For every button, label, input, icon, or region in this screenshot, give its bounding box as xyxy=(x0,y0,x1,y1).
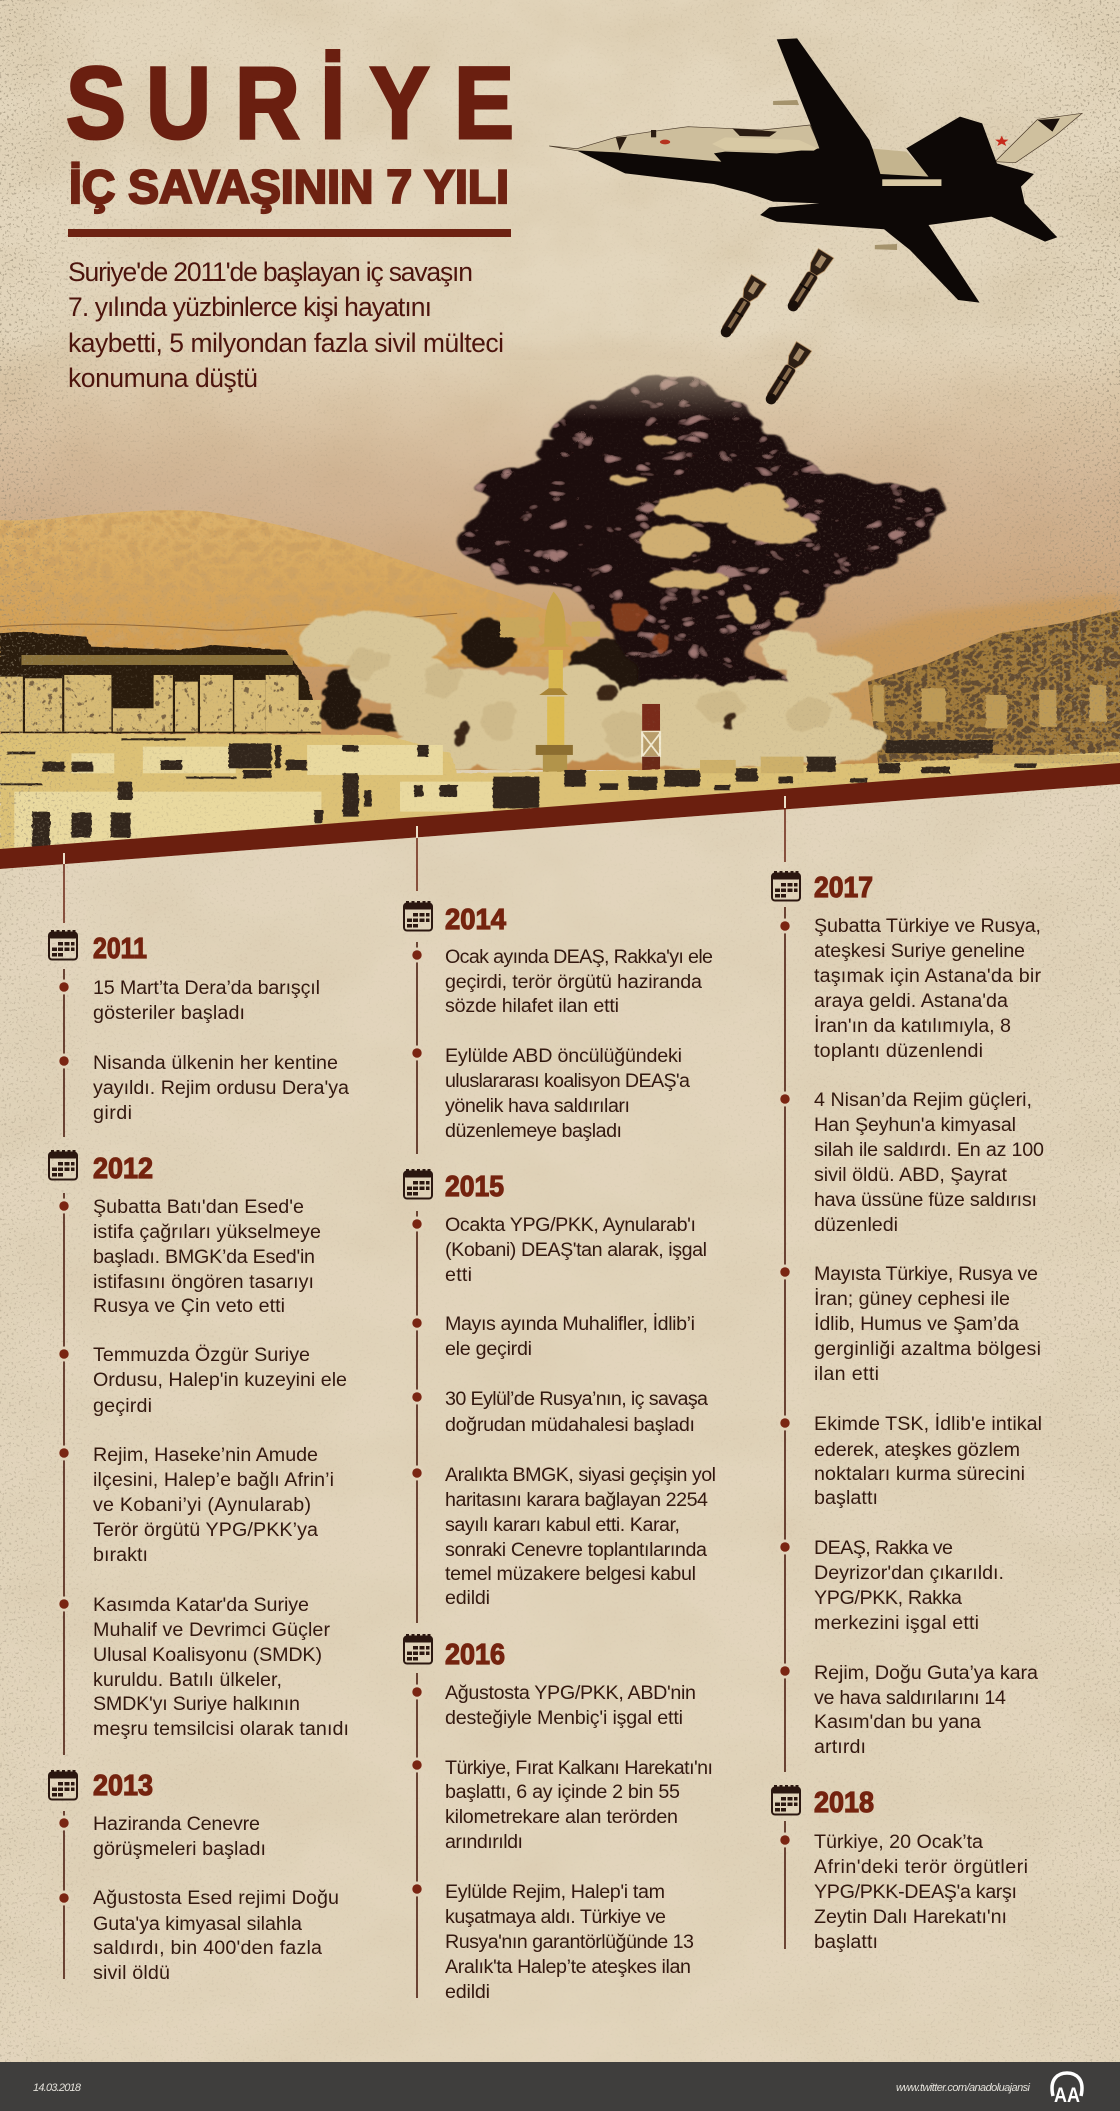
event: 30 Eylül: doğrudan müdahalesi başladı xyxy=(445,1414,695,1436)
jet silhouette xyxy=(577,38,1057,303)
event: Rejim Haseke: ve Kobani’yi (Aynularab) xyxy=(93,1494,311,1516)
event: Aralık xyxy=(445,1464,716,1609)
event: Ocak xyxy=(445,946,713,1017)
section: 2018 xyxy=(772,1785,1028,1953)
year 2013: 2013 xyxy=(93,1770,153,1802)
event: Ağustos xyxy=(445,1682,696,1729)
event: Ekim: noktaları kurma sürecini xyxy=(814,1463,1025,1485)
event: Mayıs: Mayısta Türkiye, Rusya ve xyxy=(814,1263,1038,1285)
bomb 1 xyxy=(783,249,834,315)
event: Şubat: istifa çağrıları yükselmeye xyxy=(93,1221,321,1243)
event: Eylül xyxy=(445,1045,690,1142)
event: DEAŞ Rakka: YPG/PKK, Rakka xyxy=(814,1587,962,1609)
jet red star xyxy=(995,136,1008,146)
sky glow xyxy=(0,330,1120,770)
event: Kasım: Kasımda Katar'da Suriye xyxy=(93,1594,309,1616)
year 2015: 2015 xyxy=(445,1171,504,1203)
event: Şubat xyxy=(814,915,1041,1062)
minaret xyxy=(536,592,573,778)
event: Ağustos: desteğiyle Menbiç'i işgal etti xyxy=(445,1707,683,1729)
event: Haziran xyxy=(93,1813,266,1860)
rising orange fire xyxy=(610,602,671,653)
event: DEAŞ Rakka xyxy=(814,1537,1004,1634)
event: Eylül: kuşatmaya aldı. Türkiye ve xyxy=(445,1906,666,1928)
foreground rooftops xyxy=(0,733,1120,873)
event: Aralık: edildi xyxy=(445,1587,490,1609)
event: Eylül: uluslararası koalisyon DEAŞ'a xyxy=(445,1070,690,1092)
hero scene: city, mountains and explosion xyxy=(0,330,1120,873)
event: Kasım: meşru temsilcisi olarak tanıdı xyxy=(93,1718,349,1740)
right hillside city xyxy=(868,610,1120,767)
pale smoke columns xyxy=(296,612,886,772)
event: Ocak xyxy=(445,1214,707,1286)
event: Doğu Guta xyxy=(814,1662,1038,1758)
event: Şubat: istifasını öngören tasarıyı xyxy=(93,1271,314,1293)
event: Rejim Haseke: ilçesini, Halep’e bağlı Afrin’i xyxy=(93,1469,334,1491)
jet rear fuselage and tail xyxy=(869,148,932,178)
event: Ağustos: sivil öldü xyxy=(93,1962,170,1984)
event: Ocak: Zeytin Dalı Harekatı'nı xyxy=(814,1906,1007,1928)
logo: Anadolu Agency xyxy=(1052,2073,1082,2107)
event: Mayıs: ilan etti xyxy=(814,1363,879,1385)
icon: fighter jet xyxy=(549,38,1082,303)
midground gold blocks xyxy=(500,617,600,637)
cloud light billows xyxy=(607,435,814,625)
event: Şubat xyxy=(93,1196,321,1317)
year 2012: 2012 xyxy=(93,1153,153,1185)
subtitle: İç savaşının 7 yılı: İÇ SAVAŞININ 7 YILI xyxy=(69,160,509,213)
event: Şubat: toplantı düzenlendi xyxy=(814,1040,983,1062)
event: Eylül: Rusya'nın garantörlüğünde 13 xyxy=(445,1931,694,1953)
left mountain xyxy=(0,510,614,667)
intro text: 7. yılında yüzbinlerce kişi hayatını xyxy=(68,292,432,322)
event: Aralık: temel müzakere belgesi kabul xyxy=(445,1563,696,1585)
event: Fırat Kalkanı: başlattı, 6 ay içinde 2 bin 55 xyxy=(445,1781,680,1803)
event: Mayıs xyxy=(445,1312,695,1360)
event: Ekim xyxy=(814,1412,1042,1509)
section: 2016 xyxy=(404,1634,713,2003)
event: Ocak: Türkiye, 20 Ocak’ta xyxy=(814,1831,983,1853)
event: Temmuz: geçirdi xyxy=(93,1395,152,1417)
event: Haziran: görüşmeleri başladı xyxy=(93,1838,266,1860)
event: 4 Nisan: sivil öldü. ABD, Şayrat xyxy=(814,1164,1008,1186)
jet pod highlights xyxy=(712,100,941,250)
event: Mayıs: gerginliği azaltma bölgesi xyxy=(814,1338,1041,1360)
event: Aralık: sayılı kararı kabul etti. Karar, xyxy=(445,1514,680,1536)
event: 4 Nisan: düzenledi xyxy=(814,1214,898,1236)
event: Temmuz xyxy=(93,1344,347,1417)
section: 2013 xyxy=(49,1770,339,1984)
event: Nisan: yayıldı. Rejim ordusu Dera'ya xyxy=(93,1077,349,1099)
event: DEAŞ Rakka: merkezini işgal etti xyxy=(814,1612,979,1634)
intro text: konumuna düştü xyxy=(68,363,258,393)
event: Eylül: edildi xyxy=(445,1981,490,2003)
event: Ocak: Ocakta YPG/PKK, Aynularab'ı xyxy=(445,1214,696,1236)
jet tail dark flash xyxy=(1038,118,1060,132)
event: DEAŞ Rakka: DEAŞ, Rakka ve xyxy=(814,1537,953,1559)
icon: calendar 2011 xyxy=(49,930,77,960)
event: Kasım: Muhalif ve Devrimci Güçler xyxy=(93,1619,330,1641)
event: Şubat: araya geldi. Astana'da xyxy=(814,990,1008,1012)
intro text: Suriye'de 2011'de başlayan iç savaşın xyxy=(68,257,473,287)
event: Şubat: Rusya ve Çin veto etti xyxy=(93,1295,285,1317)
event: Ocak: Afrin'deki terör örgütleri xyxy=(814,1856,1028,1878)
lower ridge line xyxy=(0,613,457,630)
foreground pale buildings xyxy=(14,745,493,848)
event: Nisan: girdi xyxy=(93,1102,132,1124)
event: Ocak: (Kobani) DEAŞ'tan alarak, işgal xyxy=(445,1239,707,1261)
section: 2012 xyxy=(49,1150,349,1740)
footer date: 14.03.2018 xyxy=(33,2082,82,2094)
timeline column 2 lines and dots xyxy=(410,826,424,1998)
event: Ocak: geçirdi, terör örgütü haziranda xyxy=(445,971,702,993)
event: Aralık: sonraki Cenevre toplantılarında xyxy=(445,1539,707,1561)
event: Şubat: Şubatta Batı'dan Esed'e xyxy=(93,1196,304,1218)
paper below band xyxy=(0,784,1120,2062)
event: Rejim Haseke: bıraktı xyxy=(93,1544,148,1566)
event: Eylül: yönelik hava saldırıları xyxy=(445,1095,630,1117)
event: Şubat: Şubatta Türkiye ve Rusya, xyxy=(814,915,1041,937)
event: Nisan: Nisanda ülkenin her kentine xyxy=(93,1052,338,1074)
jet canopy and intake details xyxy=(616,128,777,151)
antenna tower xyxy=(642,704,660,777)
event: Eylül: Eylülde Rejim, Halep'i tam xyxy=(445,1881,665,1903)
event: Kasım: SMDK'yı Suriye halkının xyxy=(93,1693,300,1715)
title: SURİYE: SURİYE xyxy=(66,47,514,160)
right city towers xyxy=(873,685,1106,728)
event: Ekim: ederek, ateşkes gözlem xyxy=(814,1439,1020,1461)
event: Nisan xyxy=(93,1052,349,1124)
event: 4 Nisan: 4 Nisan’da Rejim güçleri, xyxy=(814,1089,1032,1111)
event: Ocak xyxy=(814,1831,1028,1953)
event: 30 Eylül xyxy=(445,1388,708,1436)
icon: calendar 2018 xyxy=(772,1785,800,1814)
icon: calendar 2015 xyxy=(404,1169,432,1198)
event: Fırat Kalkanı: arındırıldı xyxy=(445,1831,523,1853)
bomb 3 xyxy=(761,342,812,408)
section: 2017 xyxy=(772,871,1044,1758)
bomb 2 xyxy=(716,275,767,341)
section: 2014 xyxy=(404,901,713,1142)
lower right buildings xyxy=(700,755,1120,773)
footer url: www.twitter.com/anadoluajansi xyxy=(896,2082,1031,2094)
event: Doğu Guta: Rejim, Doğu Guta’ya kara xyxy=(814,1662,1038,1684)
event: Fırat Kalkanı: Türkiye, Fırat Kalkanı Harekatı'nı xyxy=(445,1757,713,1779)
event: Ocak: başlattı xyxy=(814,1931,878,1953)
dark gaps in pale smoke xyxy=(454,685,737,747)
smoke shading xyxy=(343,647,829,757)
event: Kasım: kuruldu. Batılı ülkeler, xyxy=(93,1669,282,1691)
event: 30 Eylül: 30 Eylül’de Rusya’nın, iç savaşa xyxy=(445,1388,708,1410)
event: Ocak: Ocak ayında DEAŞ, Rakka'yı ele xyxy=(445,946,713,968)
event: Kasım xyxy=(93,1594,349,1740)
tree line xyxy=(0,632,321,733)
left midground gold strip xyxy=(21,655,293,665)
event: Haziran: Haziranda Cenevre xyxy=(93,1813,260,1835)
event: DEAŞ Rakka: Deyrizor'dan çıkarıldı. xyxy=(814,1562,1004,1584)
event: Ağustos: Ağustosta Esed rejimi Doğu xyxy=(93,1887,339,1909)
event: 4 Nisan: hava üssüne füze saldırısı xyxy=(814,1189,1037,1211)
event: Eylül: düzenlemeye başladı xyxy=(445,1120,622,1142)
top haze over cloud xyxy=(470,360,890,420)
event: Rejim Haseke xyxy=(93,1444,334,1566)
event: Ekim: Ekimde TSK, İdlib'e intikal xyxy=(814,1412,1042,1435)
event: Mayıs: Mayıs ayında Muhalifler, İdlib’i xyxy=(445,1312,695,1335)
event: Doğu Guta: artırdı xyxy=(814,1736,866,1758)
event: Mayıs: İdlib, Humus ve Şam’da xyxy=(814,1312,1019,1335)
event: Ağustos: Guta'ya kimyasal silahla xyxy=(93,1913,302,1935)
event: Rejim Haseke: Terör örgütü YPG/PKK’ya xyxy=(93,1519,318,1541)
scene drawn in stretched coordinates xyxy=(0,375,1120,873)
event: Temmuz: Ordusu, Halep'in kuzeyini ele xyxy=(93,1369,347,1391)
left midground buildings xyxy=(0,675,321,732)
event: Mayıs xyxy=(814,1263,1041,1385)
event: Ocak: YPG/PKK-DEAŞ'a karşı xyxy=(814,1881,1017,1903)
year 2011: 2011 xyxy=(93,933,147,965)
event: Fırat Kalkanı xyxy=(445,1757,713,1853)
foreground dark windows and shadows xyxy=(0,738,1036,847)
icon: calendar 2016 xyxy=(404,1634,432,1664)
event: 15 Mart xyxy=(93,977,320,1024)
event: Eylül: Eylülde ABD öncülüğündeki xyxy=(445,1045,682,1067)
event: Eylül: Aralık'ta Halep’te ateşkes ilan xyxy=(445,1956,691,1978)
black smoke cloud xyxy=(457,375,950,697)
logo: Anadolu Agency: AA xyxy=(1054,2084,1080,2107)
event: Ekim: başlattı xyxy=(814,1487,878,1509)
event: Fırat Kalkanı: kilometrekare alan terörden xyxy=(445,1806,678,1828)
event: Aralık: haritasını karara bağlayan 2254 xyxy=(445,1489,708,1511)
event: Şubat: İran'ın da katılımıyla, 8 xyxy=(814,1014,1011,1037)
event: Ocak: etti xyxy=(445,1264,472,1286)
timeline column 3 lines and dots xyxy=(778,796,792,1949)
event: Mayıs: İran; güney cephesi ile xyxy=(814,1287,1010,1310)
event: Doğu Guta: ve hava saldırılarını 14 xyxy=(814,1687,1006,1709)
event: Temmuz: Temmuzda Özgür Suriye xyxy=(93,1344,310,1366)
icon: calendar 2017 xyxy=(772,871,800,900)
timeline column 1 lines and dots xyxy=(56,853,72,1979)
event: Şubat: taşımak için Astana'da bir xyxy=(814,965,1041,987)
event: Mayıs: ele geçirdi xyxy=(445,1338,532,1360)
event: Ağustos: saldırdı, bin 400'den fazla xyxy=(93,1937,322,1959)
intro text xyxy=(68,257,504,393)
icon: calendar 2013 xyxy=(49,1770,77,1800)
event: Rejim Haseke: Rejim, Haseke’nin Amude xyxy=(93,1444,318,1466)
icon: bombs xyxy=(716,249,834,408)
event: Ağustos xyxy=(93,1887,339,1984)
event: 4 Nisan: Han Şeyhun'a kimyasal xyxy=(814,1114,1016,1136)
year 2018: 2018 xyxy=(814,1787,874,1819)
event: Kasım: Ulusal Koalisyonu (SMDK) xyxy=(93,1644,322,1666)
year 2014: 2014 xyxy=(445,904,506,936)
event: Ocak: sözde hilafet ilan etti xyxy=(445,995,619,1017)
event: Aralık: Aralıkta BMGK, siyasi geçişin yol xyxy=(445,1464,716,1486)
diagonal band xyxy=(0,763,1120,869)
year 2017: 2017 xyxy=(814,872,873,904)
event: Ağustos: Ağustosta YPG/PKK, ABD'nin xyxy=(445,1682,696,1704)
right distant mountain xyxy=(821,593,1120,763)
footer bar xyxy=(0,2062,1120,2111)
event: Şubat: ateşkesi Suriye geneline xyxy=(814,940,1025,962)
event: Eylül xyxy=(445,1881,694,2003)
event: Doğu Guta: Kasım'dan bu yana xyxy=(814,1711,981,1733)
event: 15 Mart: 15 Mart’ta Dera’da barışçıl xyxy=(93,977,320,999)
icon: calendar 2012 xyxy=(49,1150,77,1180)
event: Şubat: başladı. BMGK’da Esed'in xyxy=(93,1246,315,1268)
year 2016: 2016 xyxy=(445,1639,505,1671)
event: 4 Nisan xyxy=(814,1089,1044,1236)
jet light upper fuselage xyxy=(549,125,821,163)
intro text: kaybetti, 5 milyondan fazla sivil mülteci xyxy=(68,328,504,358)
section: 2015 xyxy=(404,1169,716,1609)
dark gaps behind smoke xyxy=(321,618,661,730)
section: 2011 xyxy=(49,930,349,1124)
title rule xyxy=(68,229,511,237)
event: 4 Nisan: silah ile saldırdı. En az 100 xyxy=(814,1139,1044,1161)
icon: calendar 2014 xyxy=(404,901,432,930)
event: 15 Mart: gösteriler başladı xyxy=(93,1002,245,1024)
